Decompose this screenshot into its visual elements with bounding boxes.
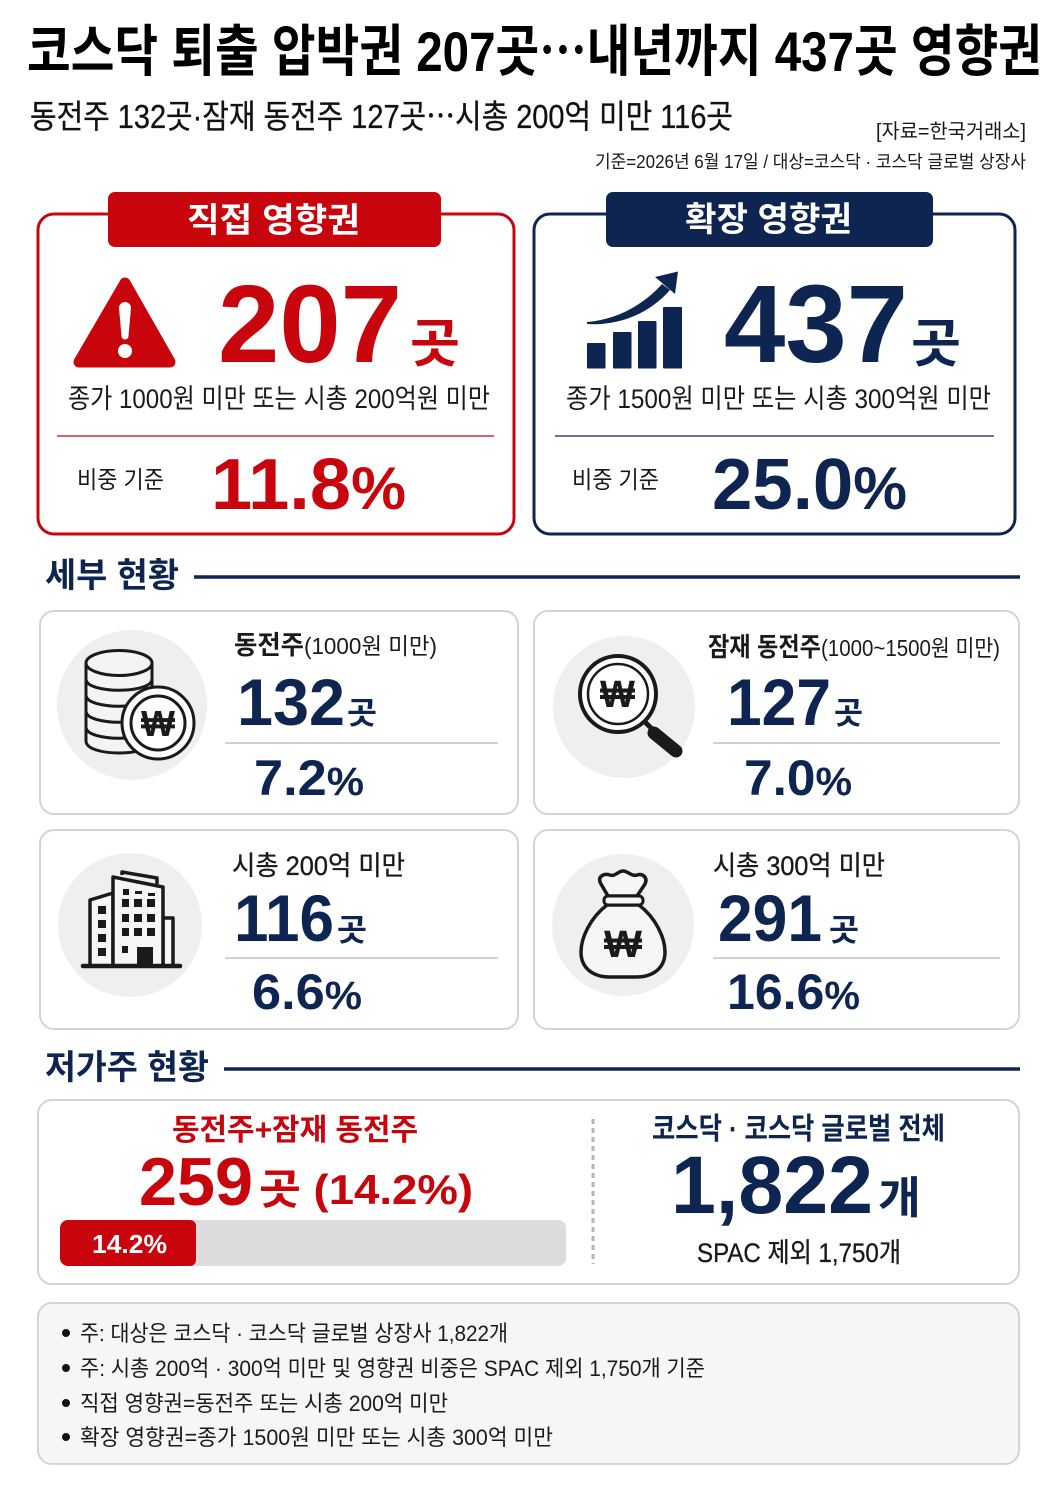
icon: building	[58, 853, 202, 997]
label: 시총 200억 미만	[232, 851, 405, 881]
excluding SPAC: SPAC 제외 1,750개	[697, 1238, 901, 1268]
share: 6.6%	[252, 964, 362, 1020]
icon: magnifier: ₩	[600, 674, 635, 716]
label: 동전주(1000원 미만)	[234, 630, 437, 660]
unit: 곳	[410, 316, 460, 374]
note 4: 확장 영향권=종가 1500원 미만 또는 시총 300억 미만	[80, 1425, 553, 1450]
subtitle: 동전주 132곳·잠재 동전주 127곳…시총 200억 미만 116곳	[30, 90, 733, 138]
icon: magnifier	[553, 636, 695, 778]
panel: cap under 20 billion	[40, 830, 518, 1029]
note 3: 직접 영향권=동전주 또는 시총 200억 미만	[80, 1391, 448, 1416]
progress bar	[60, 1220, 566, 1266]
note 1: 주: 대상은 코스닥 · 코스닥 글로벌 상장사 1,822개	[80, 1321, 508, 1346]
panel: cap under 20 billion: 곳	[337, 913, 367, 948]
icon: money bag: ₩	[604, 924, 642, 966]
label: penny plus potential: 동전주+잠재 동전주	[172, 1114, 418, 1147]
icon: warning triangle	[79, 283, 170, 362]
panel: footnotes	[38, 1303, 1019, 1464]
panel: potential penny stocks: 곳	[834, 696, 863, 731]
count: 127	[727, 665, 831, 739]
panel: cap under 30 billion: 곳	[829, 913, 859, 948]
share label: 비중 기준	[77, 467, 164, 494]
label: 잠재 동전주(1000~1500원 미만)	[708, 632, 1000, 662]
source: [자료=한국거래소]	[876, 120, 1026, 143]
panel: low-priced summary: 곳 (14.2%)	[259, 1166, 473, 1213]
badge: direct impact: 직접 영향권	[187, 202, 360, 240]
value: 207: 207	[218, 263, 402, 386]
label: all listed: 코스닥 · 코스닥 글로벌 전체	[652, 1113, 945, 1146]
icon: money bag	[552, 854, 694, 996]
share value: 11.8%	[211, 445, 406, 525]
heading: details: 세부 현황	[45, 557, 179, 595]
badge: direct impact	[108, 192, 441, 247]
count: 132	[237, 665, 345, 739]
progress bar: 14.2%	[92, 1229, 167, 1259]
panel: direct impact	[38, 192, 514, 534]
criteria: 종가 1500원 미만 또는 시총 300억원 미만	[566, 384, 991, 414]
value: 259: 259	[139, 1144, 253, 1220]
heading: low-priced stocks: 저가주 현황	[45, 1049, 209, 1087]
icon: coins: ₩	[141, 703, 175, 744]
note 2: 주: 시총 200억 · 300억 미만 및 영향권 비중은 SPAC 제외 1,750개 기준	[80, 1356, 705, 1381]
icon: coins	[57, 630, 207, 780]
value: 437: 437	[724, 263, 908, 386]
share: 16.6%	[727, 964, 860, 1020]
share: 7.0%	[744, 750, 852, 806]
panel: low-priced summary	[38, 1100, 1019, 1284]
icon: rising bars	[587, 272, 682, 368]
label: 시총 300억 미만	[713, 851, 885, 881]
panel: extended impact	[534, 192, 1015, 534]
panel: penny stocks: 곳	[347, 696, 377, 731]
criteria: 종가 1000원 미만 또는 시총 200억원 미만	[68, 384, 490, 414]
panel: low-priced summary: 개	[878, 1174, 921, 1223]
count: 291	[718, 881, 822, 955]
share: 7.2%	[254, 750, 364, 806]
basis note: 기준=2026년 6월 17일 / 대상=코스닥 · 코스닥 글로벌 상장사	[595, 152, 1026, 172]
badge: extended impact: 확장 영향권	[685, 201, 852, 239]
share label: 비중 기준	[572, 467, 659, 494]
value: 1,822: 1,822	[671, 1140, 873, 1231]
panel: penny stocks	[40, 611, 518, 814]
share value: 25.0%	[712, 445, 907, 525]
panel: potential penny stocks	[534, 611, 1019, 814]
unit: 곳	[911, 316, 961, 374]
count: 116	[234, 881, 334, 955]
panel: cap under 30 billion	[534, 830, 1019, 1029]
badge: extended impact	[606, 192, 933, 247]
